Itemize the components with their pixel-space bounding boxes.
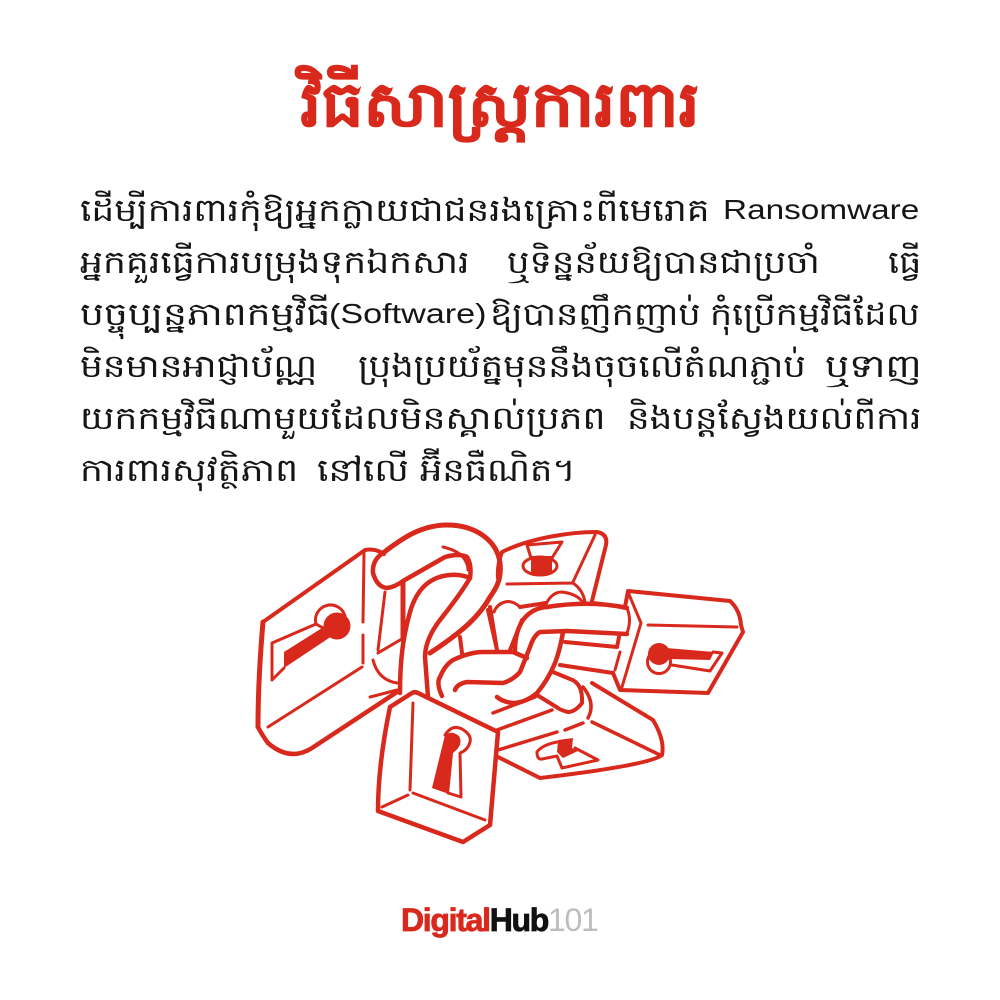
- body text block: យកកម្មវិធីណាមួយដែលមិនស្គាល់ប្រភព: [80, 400, 605, 436]
- body text block: មិនមានអាជ្ញាប័ណ្ណ: [80, 348, 317, 384]
- body text block: កុំប្រើកម្មវិធីដែល: [710, 296, 920, 332]
- body text block: ធ្វើ: [888, 244, 921, 280]
- icon: front padlock: [377, 692, 498, 843]
- body text block: នៅលើ: [317, 452, 409, 488]
- logo: DigitalHub101: [401, 902, 598, 938]
- body text block: (Software): [329, 298, 487, 329]
- body text block: ប្រុងប្រយ័ត្នមុននឹងចុចលើតំណភ្ជាប់: [358, 348, 806, 384]
- icon: big left padlock: [258, 550, 397, 754]
- body text block: ឬទិន្នន័យឱ្យបានជាប្រចាំ: [507, 244, 820, 280]
- body text block: ឱ្យបានញឹកញាប់: [490, 296, 701, 332]
- icon: bars behind links: [370, 592, 625, 697]
- body text block: និងបន្តស្វែងយល់ពីការ: [627, 400, 921, 436]
- title: វិធីសាស្ត្រការពារ: [300, 70, 700, 140]
- body text block: ដើម្បីការពារកុំឱ្យអ្នកក្លាយជាជនរងគ្រោះពីមេរោគ: [80, 192, 710, 228]
- body text block: អ្នកគួរធ្វើការបម្រុងទុកឯកសារ: [80, 244, 469, 280]
- body text block: [80, 190, 922, 492]
- icon: top back padlock: [494, 532, 606, 612]
- icon: right padlock: [613, 591, 743, 693]
- body text block: ឬទាញ: [825, 348, 922, 384]
- body text block: ការពារសុវត្ថិភាព: [80, 452, 298, 488]
- body text block: អ៊ីនធឺណិត។: [420, 452, 576, 488]
- icon: chain links: [438, 604, 627, 703]
- icon: lower back padlock: [493, 672, 663, 778]
- body text block: Ransomware: [723, 194, 919, 225]
- body text block: បច្ចុប្បន្នភាពកម្មវិធី: [80, 296, 330, 332]
- icon: big shackle: [373, 525, 500, 697]
